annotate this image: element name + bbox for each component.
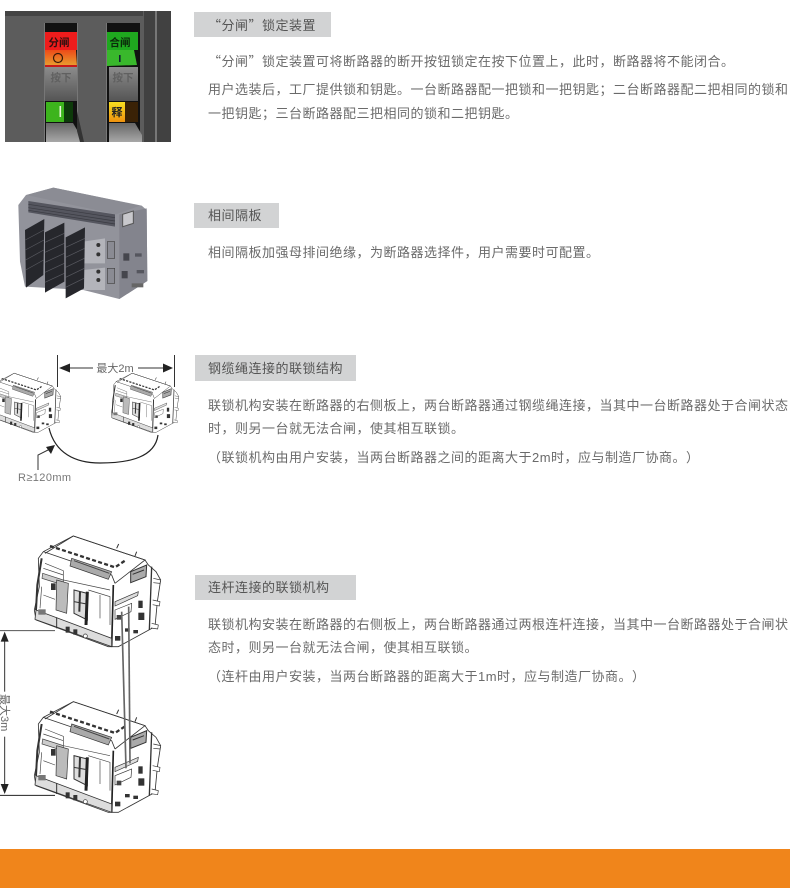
text: cable interlock description: 时，则另一台就无法合闸，使其相互联锁。	[208, 421, 465, 436]
text: cable interlock description	[208, 398, 789, 465]
right slot: 合闸	[110, 36, 130, 49]
heading: opening lock	[194, 12, 331, 37]
phase barriers	[25, 219, 85, 298]
text: linkage interlock description	[208, 617, 789, 684]
illustration: breaker with phase barriers	[18, 188, 148, 299]
radius callout	[18, 445, 71, 484]
diagram: cable interlock	[0, 355, 180, 484]
linkage rods	[122, 607, 130, 768]
photo: opening lock buttons	[5, 11, 171, 142]
left slot: 分闸	[48, 36, 70, 49]
text: linkage interlock description: （连杆由用户安装，当两台断路器的距离大于1m时，应与制造厂协商。）	[208, 669, 646, 684]
text: opening lock description: 一把钥匙；三台断路器配三把相同的锁和二把钥匙。	[208, 106, 519, 121]
heading: cable interlock	[195, 355, 356, 381]
text: phase barrier description: 相间隔板加强母排间绝缘，为断路器选择件，用户需要时可配置。	[208, 245, 600, 260]
text: cable interlock description: 联锁机构安装在断路器的右侧板上，两台断路器通过钢缆绳连接，当其中一台断路器处于合闸状态	[208, 398, 789, 413]
diagram: linkage interlock	[0, 536, 162, 813]
text: opening lock description: “分闸”锁定装置可将断路器的断开按钮锁定在按下位置上，此时，断路器将不能闭合。	[208, 51, 735, 70]
text: linkage interlock description: 联锁机构安装在断路器的右侧板上，两台断路器通过两根连杆连接，当其中一台断路器处于合闸状	[208, 617, 789, 632]
left slot: 按下	[50, 71, 72, 84]
heading: linkage interlock: 连杆连接的联锁机构	[208, 580, 330, 595]
dimension arrow	[0, 632, 12, 794]
heading: cable interlock: 钢缆绳连接的联锁结构	[208, 361, 343, 376]
heading: phase barrier	[194, 203, 279, 228]
text: opening lock description: 用户选装后，工厂提供锁和钥匙。一台断路器配一把锁和一把钥匙；二台断路器配二把相同的锁和	[208, 82, 789, 97]
footer band	[0, 849, 790, 888]
dimension arrows: 最大2m	[96, 361, 134, 375]
right slot: 按下	[112, 71, 134, 84]
text: linkage interlock description: 态时，则另一台就无法合闸，使其相互联锁。	[208, 640, 478, 655]
dimension arrows	[59, 361, 173, 375]
heading: phase barrier: 相间隔板	[208, 208, 262, 223]
right slot	[106, 23, 142, 142]
text: opening lock description	[208, 51, 789, 121]
steel cable	[49, 428, 158, 463]
text: cable interlock description: （联锁机构由用户安装，当两台断路器之间的距离大于2m时，应与制造厂协商。）	[208, 450, 700, 465]
radius callout: R≥120mm	[18, 472, 71, 484]
heading: linkage interlock	[195, 575, 356, 600]
right slot: 释	[112, 106, 122, 119]
heading: opening lock: “分闸”锁定装置	[208, 15, 316, 34]
left slot	[44, 23, 84, 142]
